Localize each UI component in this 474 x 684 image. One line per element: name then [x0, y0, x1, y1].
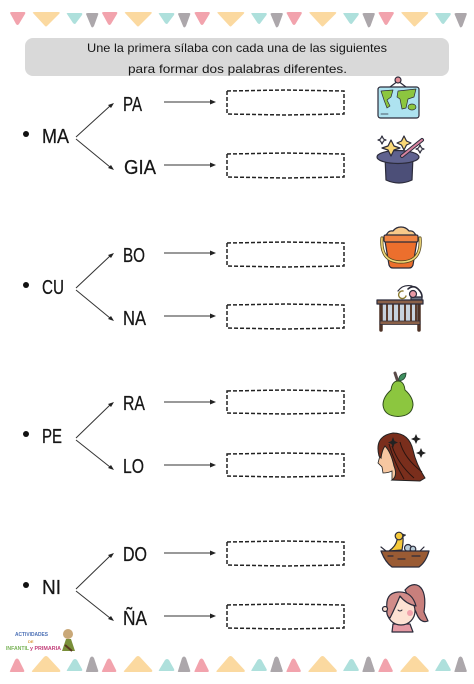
icon: hair: [378, 433, 426, 481]
logo: ACTIVIDADES: [15, 632, 48, 638]
group: CU: BO: [123, 245, 145, 267]
instruction banner: [25, 38, 449, 76]
group: MA: PA: [123, 94, 142, 116]
icon: magic hat: [377, 136, 424, 183]
group: CU: NA: [123, 308, 147, 330]
group: PE: LO: [123, 456, 144, 478]
group: NI: NI: [42, 577, 61, 599]
icon: bird nest: [381, 532, 429, 567]
group: CU: [23, 242, 344, 330]
group: NI: ÑA: [123, 606, 148, 630]
group: NI: DO: [123, 544, 147, 566]
bottom bunting: [10, 656, 467, 672]
instruction banner: para formar dos palabras diferentes.: [128, 62, 347, 76]
icon: world map: [378, 77, 419, 118]
icon: bucket: [382, 227, 420, 268]
group: PE: PE: [42, 426, 62, 448]
group: NI: [23, 541, 344, 630]
icon: crib: [377, 286, 423, 330]
logo: DE: [28, 639, 34, 644]
instruction banner: Une la primera sílaba con cada una de las siguientes: [87, 41, 387, 55]
logo: INFANTIL: [6, 646, 30, 652]
icon: pear: [383, 373, 413, 416]
group: CU: CU: [42, 277, 64, 299]
group: PE: [23, 390, 344, 478]
icon: girl: [382, 585, 428, 632]
group: MA: MA: [42, 126, 70, 148]
group: MA: [23, 90, 344, 179]
logo: [6, 629, 75, 652]
logo: y PRIMARIA: [30, 646, 61, 652]
top bunting: [10, 12, 467, 28]
group: MA: GIA: [124, 157, 157, 179]
group: PE: RA: [123, 393, 146, 415]
